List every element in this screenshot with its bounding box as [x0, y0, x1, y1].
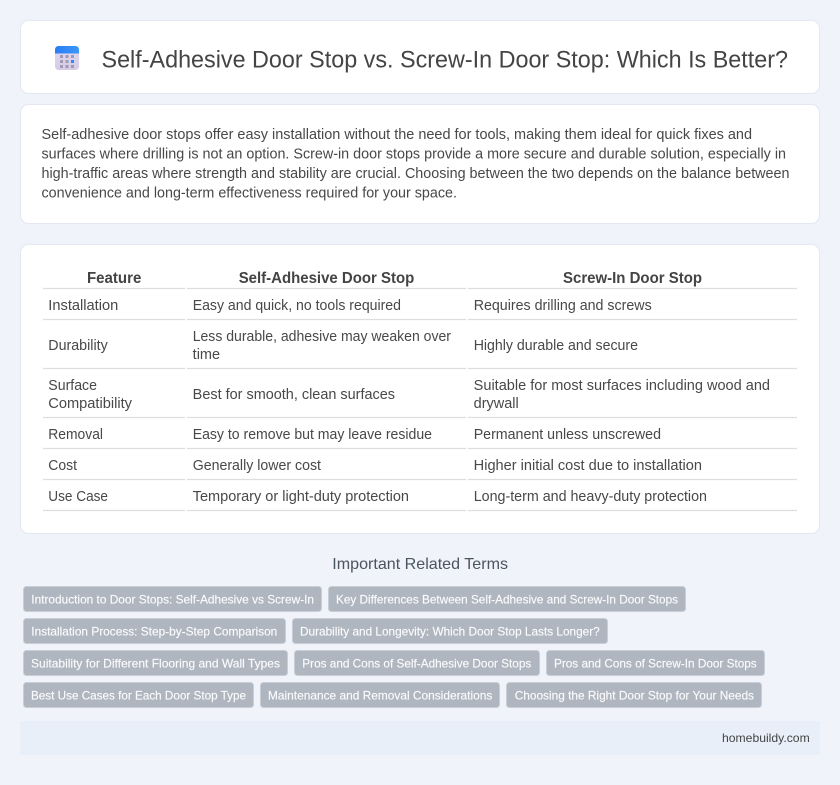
tag [24, 586, 322, 612]
footer site name: homebuildy.com [722, 731, 810, 745]
tag [292, 618, 608, 644]
panel: header [20, 20, 820, 94]
tag [24, 650, 288, 676]
row: cost: Higher initial cost due to installation [474, 458, 702, 474]
row: removal: Removal [48, 427, 103, 443]
row: surface compatibility [43, 378, 797, 418]
intro paragraph: Self-adhesive door stops offer easy installation without the need for tools, making them ideal for quick fixes and [42, 127, 752, 143]
row: installation: Installation [48, 298, 118, 314]
tag: Durability and Longevity: Which Door Stop Lasts Longer? [300, 624, 600, 638]
intro paragraph [42, 127, 790, 202]
title: Self-Adhesive Door Stop vs. Screw-In Door Stop: Which Is Better? [102, 46, 788, 74]
table header row: Self-Adhesive Door Stop [239, 270, 415, 287]
row: installation: Easy and quick, no tools required [193, 298, 401, 314]
tag: Installation Process: Step-by-Step Comparison [31, 624, 277, 638]
row: cost [43, 458, 797, 480]
intro paragraph: high-traffic areas where strength and stability are crucial. Choosing between the two depends on the balance between [42, 166, 790, 182]
tag [24, 618, 286, 644]
row: installation: Requires drilling and screws [474, 298, 652, 314]
row: use case: Long-term and heavy-duty protection [474, 489, 707, 505]
row: surface compatibility: Best for smooth, clean surfaces [193, 387, 395, 403]
row: installation [43, 298, 797, 320]
row: durability: Durability [48, 338, 108, 354]
row: use case: Temporary or light-duty protection [193, 489, 409, 505]
heading: important related terms: Important Related Terms [332, 556, 508, 573]
row: cost: Cost [48, 458, 77, 474]
row: use case: Use Case [48, 489, 108, 505]
related terms tags [24, 586, 764, 708]
row: removal: Permanent unless unscrewed [474, 427, 661, 443]
row: removal [43, 427, 797, 448]
row: cost: Generally lower cost [193, 458, 321, 474]
row: durability: time [193, 347, 220, 363]
tag [24, 682, 254, 708]
row: surface compatibility: drywall [474, 396, 519, 412]
row: removal: Easy to remove but may leave residue [193, 427, 432, 443]
tag [328, 586, 686, 612]
tag [260, 682, 500, 708]
row: surface compatibility: Compatibility [48, 396, 133, 412]
tag [294, 650, 540, 676]
tag: Pros and Cons of Screw-In Door Stops [554, 656, 757, 670]
tag [546, 650, 764, 676]
intro paragraph: surfaces where drilling is not an option. Screw-in door stops provide a more secure and durable solution, especially in [42, 146, 786, 162]
tag: Suitability for Different Flooring and Wall Types [31, 656, 280, 670]
row: durability: Highly durable and secure [474, 338, 638, 354]
icon: calendar [55, 46, 79, 70]
row: durability [43, 329, 797, 368]
tag: Pros and Cons of Self-Adhesive Door Stops [302, 656, 531, 670]
footer bar [20, 721, 820, 755]
row: durability: Less durable, adhesive may weaken over [193, 329, 451, 345]
table header row [43, 270, 797, 288]
tag: Introduction to Door Stops: Self-Adhesive vs Screw-In [31, 592, 314, 606]
tag [506, 682, 762, 708]
tag: Choosing the Right Door Stop for Your Needs [515, 688, 754, 702]
table header row: Feature [87, 270, 141, 287]
panel: comparison table [20, 244, 820, 534]
row: surface compatibility: Suitable for most surfaces including wood and [474, 378, 770, 394]
row: surface compatibility: Surface [48, 378, 97, 394]
tag: Best Use Cases for Each Door Stop Type [31, 688, 246, 702]
tag: Key Differences Between Self-Adhesive and Screw-In Door Stops [336, 592, 678, 606]
row: use case [43, 489, 797, 510]
table header row: Screw-In Door Stop [563, 270, 702, 287]
tag: Maintenance and Removal Considerations [268, 688, 492, 702]
intro paragraph: convenience and long-term effectiveness required for your space. [42, 186, 457, 202]
panel: introduction [20, 104, 820, 224]
